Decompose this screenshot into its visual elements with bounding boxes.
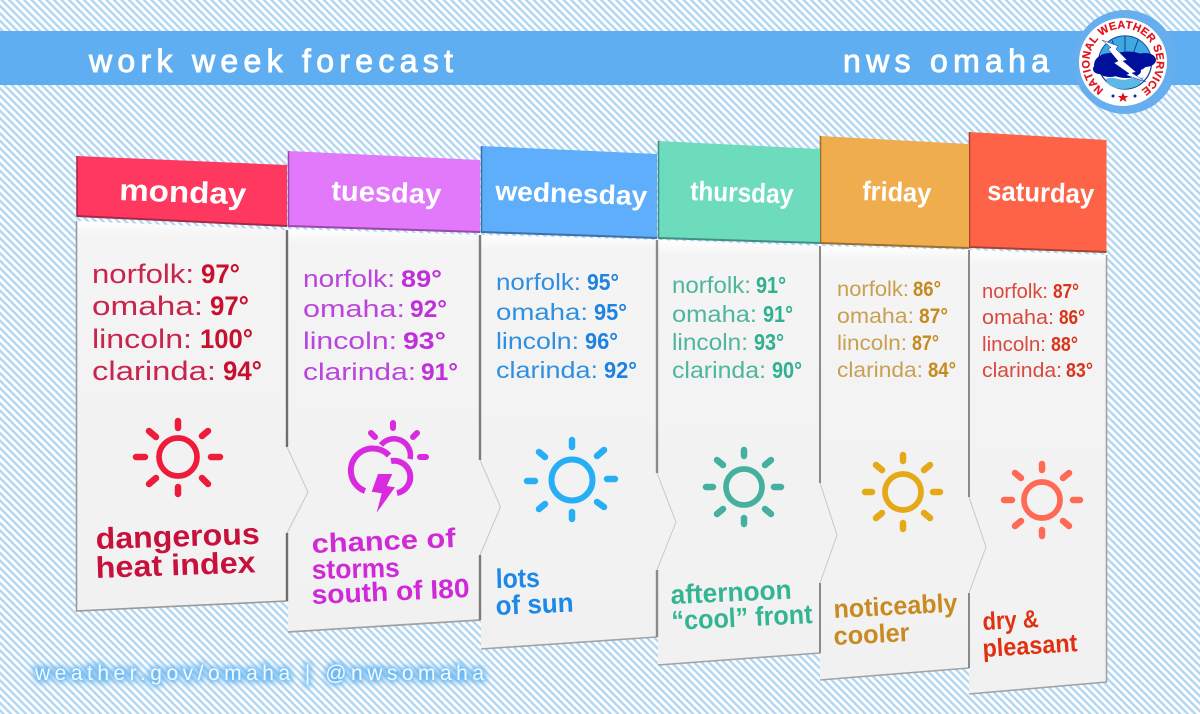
temperatures: friday: 84°	[928, 359, 956, 382]
temperatures: wednesday: lincoln:	[496, 328, 579, 354]
label: nws omaha: nws omaha	[843, 43, 1049, 79]
temperatures: monday: 97°	[210, 291, 249, 321]
header: friday: friday	[862, 176, 932, 208]
temperatures: friday: norfolk:	[837, 278, 909, 301]
temperatures: tuesday: 89°	[401, 266, 442, 293]
temperatures: thursday: 90°	[772, 357, 802, 383]
temperatures: monday: norfolk:	[92, 259, 194, 289]
temperatures: tuesday	[303, 266, 458, 386]
header: saturday: saturday	[987, 176, 1095, 209]
temperatures: wednesday: 95°	[587, 269, 619, 295]
title banner	[0, 31, 1200, 85]
temperatures: monday: 97°	[201, 259, 240, 289]
temperatures: saturday: 87°	[1053, 281, 1079, 303]
caption: afternoon cool front: afternoon	[670, 575, 792, 610]
temperatures: friday: clarinda:	[837, 359, 923, 382]
temperatures: monday: 94°	[223, 356, 262, 386]
header: friday	[820, 136, 969, 248]
temperatures: saturday: lincoln:	[982, 334, 1046, 356]
temperatures: saturday	[982, 281, 1093, 382]
panel: thursday	[658, 141, 837, 665]
icon: sun saturday	[1004, 464, 1080, 536]
header: thursday	[658, 141, 820, 243]
temperatures: wednesday: omaha:	[496, 299, 588, 325]
footer: web and social handle: weather.gov/omaha | @nwsomaha	[34, 662, 484, 685]
icon: sun monday	[136, 421, 220, 494]
caption: noticeably cooler	[833, 588, 959, 651]
caption: dangerous heat index	[95, 518, 260, 585]
temperatures: thursday: 93°	[754, 329, 784, 355]
temperatures: monday	[92, 259, 262, 386]
caption: dry & pleasant	[982, 605, 1079, 663]
temperatures: monday: clarinda:	[92, 356, 216, 386]
icon: national weather service logo	[1078, 10, 1172, 114]
temperatures: thursday: lincoln:	[672, 329, 748, 355]
temperatures: saturday: norfolk:	[982, 281, 1048, 303]
title: work week forecast: work week forecast	[88, 43, 453, 79]
temperatures: tuesday: lincoln:	[303, 328, 397, 355]
caption: chance of storms south of i80	[311, 523, 470, 610]
temperatures: wednesday	[496, 269, 637, 383]
caption: dry & pleasant: dry &	[982, 605, 1039, 636]
temperatures: wednesday: 96°	[585, 328, 618, 354]
panel: monday	[76, 156, 308, 611]
temperatures: wednesday: 92°	[604, 357, 637, 383]
header: wednesday	[481, 146, 657, 238]
caption: lots of sun: of sun	[495, 588, 574, 621]
icon: sun thursday	[706, 450, 781, 524]
caption: dangerous heat index: heat index	[95, 546, 256, 585]
temperatures: monday: omaha:	[92, 291, 203, 321]
caption: afternoon cool front	[670, 575, 813, 636]
header: monday	[76, 156, 287, 226]
caption: dry & pleasant: pleasant	[982, 629, 1079, 663]
header: monday: monday	[119, 174, 247, 211]
temperatures: saturday: 86°	[1059, 307, 1085, 329]
caption: dangerous heat index: dangerous	[95, 518, 260, 556]
caption: chance of storms south of i80: south of I80	[311, 573, 470, 610]
temperatures: friday: 87°	[919, 305, 948, 328]
icon: sun wednesday	[527, 440, 615, 519]
header: saturday	[969, 132, 1106, 252]
temperatures: thursday: clarinda:	[672, 357, 766, 383]
temperatures: saturday: 88°	[1051, 334, 1078, 356]
temperatures: friday	[837, 278, 956, 382]
temperatures: wednesday: norfolk:	[496, 269, 581, 295]
caption: noticeably cooler: noticeably	[833, 588, 959, 624]
temperatures: wednesday: clarinda:	[496, 357, 598, 383]
icon: sun friday	[865, 455, 940, 529]
panel: wednesday	[481, 146, 676, 649]
panel: saturday	[969, 132, 1106, 694]
temperatures: tuesday: 92°	[410, 296, 447, 323]
panel: friday	[820, 136, 986, 680]
temperatures: tuesday: clarinda:	[303, 359, 416, 386]
temperatures: friday: 87°	[912, 332, 939, 355]
temperatures: tuesday: norfolk:	[303, 266, 395, 293]
caption: chance of storms south of i80: storms	[311, 553, 400, 585]
icon: storm cloud with sun	[351, 423, 426, 513]
temperatures: tuesday: omaha:	[303, 296, 405, 323]
caption: chance of storms south of i80: chance of	[311, 523, 457, 559]
temperatures: monday: lincoln:	[92, 324, 192, 354]
temperatures: friday: omaha:	[837, 305, 914, 328]
temperatures: thursday: norfolk:	[672, 272, 751, 298]
header: tuesday: tuesday	[331, 175, 442, 210]
icon: national weather service logo: NATIONAL WEATHER SERVICE	[1082, 20, 1164, 96]
temperatures: saturday: clarinda:	[982, 360, 1062, 382]
header: tuesday	[288, 151, 480, 232]
temperatures: thursday: omaha:	[672, 301, 757, 327]
temperatures: wednesday: 95°	[594, 299, 627, 325]
caption: afternoon cool front: “cool” front	[671, 599, 813, 636]
temperatures: tuesday: 93°	[403, 328, 446, 355]
temperatures: friday: 86°	[913, 278, 941, 301]
caption: lots of sun: lots	[495, 563, 540, 594]
temperatures: friday: lincoln:	[837, 332, 907, 355]
panel: tuesday	[288, 151, 500, 632]
caption: lots of sun	[495, 563, 574, 621]
temperatures: thursday	[672, 272, 802, 383]
temperatures: saturday: omaha:	[982, 307, 1054, 329]
temperatures: monday: 100°	[200, 324, 253, 354]
temperatures: saturday: 83°	[1066, 360, 1093, 382]
header: wednesday: wednesday	[494, 176, 648, 211]
temperatures: thursday: 91°	[756, 272, 786, 298]
temperatures: tuesday: 91°	[421, 359, 458, 386]
footer: web and social handle: weather.gov/omaha | @nwsomaha	[34, 662, 484, 685]
header: thursday: thursday	[690, 176, 794, 210]
temperatures: thursday: 91°	[763, 301, 793, 327]
caption: noticeably cooler: cooler	[833, 617, 910, 651]
